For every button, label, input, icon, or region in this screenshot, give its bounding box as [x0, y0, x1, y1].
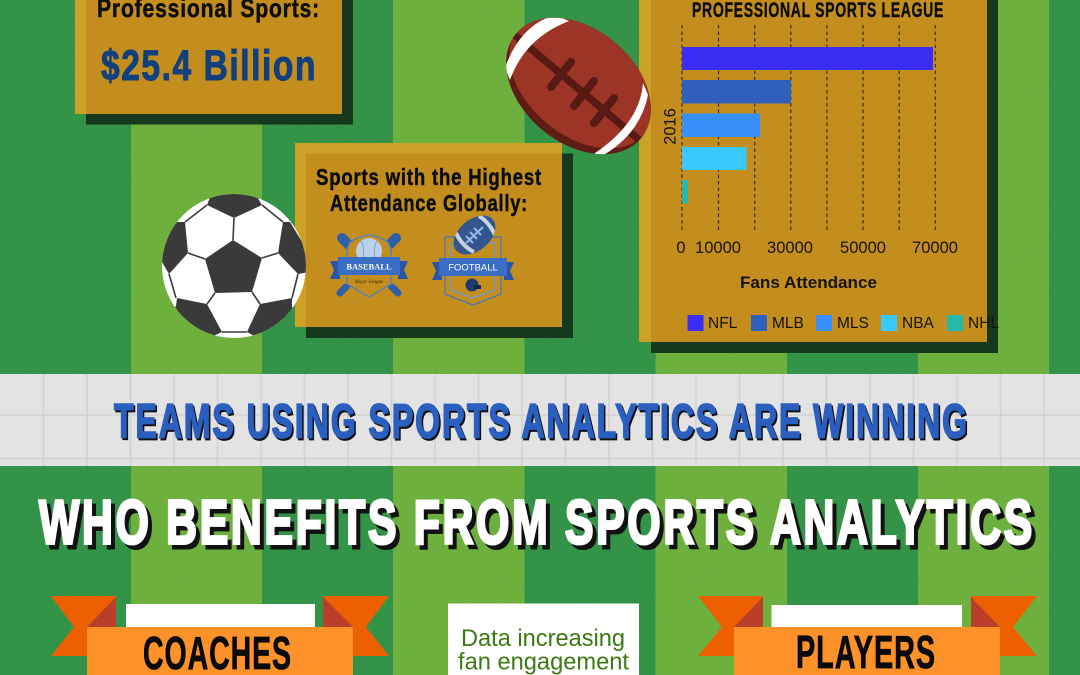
chart legend [688, 315, 999, 332]
panel: attendance bar chart [639, 0, 999, 353]
axis tick labels: 10000 [695, 239, 741, 257]
heading: sports with the highest attendance: Attendance Globally: [330, 190, 528, 216]
banner: teams using sports analytics [0, 374, 1080, 466]
card: players [698, 596, 1037, 675]
panel: professional sports revenue [75, 0, 353, 124]
axis label: year: 2016 [662, 108, 680, 145]
icon: baseball badge [330, 235, 408, 297]
card: coaches [51, 596, 389, 675]
panel: highest attendance sports [295, 143, 573, 338]
icon: american football [506, 18, 651, 154]
text: data increasing fan engagement [458, 625, 629, 675]
chart legend: MLS [837, 315, 869, 332]
text: data increasing fan engagement: fan engagement [458, 648, 629, 675]
icon: football badge [432, 208, 514, 305]
figure: revenue amount: $25.4 Billion [101, 42, 317, 90]
card: fan engagement [448, 604, 639, 675]
axis tick labels: 30000 [767, 239, 813, 257]
chart legend: NFL [708, 315, 738, 332]
chart legend: NHL [968, 315, 999, 332]
bar chart: fans attendance by league [682, 47, 933, 204]
chart legend: MLB [772, 315, 804, 332]
icon: baseball badge: Major League [354, 280, 384, 285]
icon: baseball badge: BASEBALL [346, 262, 392, 272]
chart legend: NBA [902, 315, 935, 332]
heading: sports with the highest attendance: Sports with the Highest [316, 164, 542, 190]
axis tick labels [676, 239, 958, 257]
heading: sports with the highest attendance [316, 164, 542, 216]
text: data increasing fan engagement: Data increasing [461, 625, 625, 652]
axis tick labels: 0 [676, 239, 686, 257]
axis title: Fans Attendance [740, 273, 877, 292]
icon: football badge: FOOTBALL [448, 262, 498, 274]
icon: soccer ball [162, 194, 306, 338]
axis tick labels: 50000 [840, 239, 886, 257]
axis tick labels: 70000 [912, 239, 958, 257]
chart gridlines [682, 25, 935, 231]
